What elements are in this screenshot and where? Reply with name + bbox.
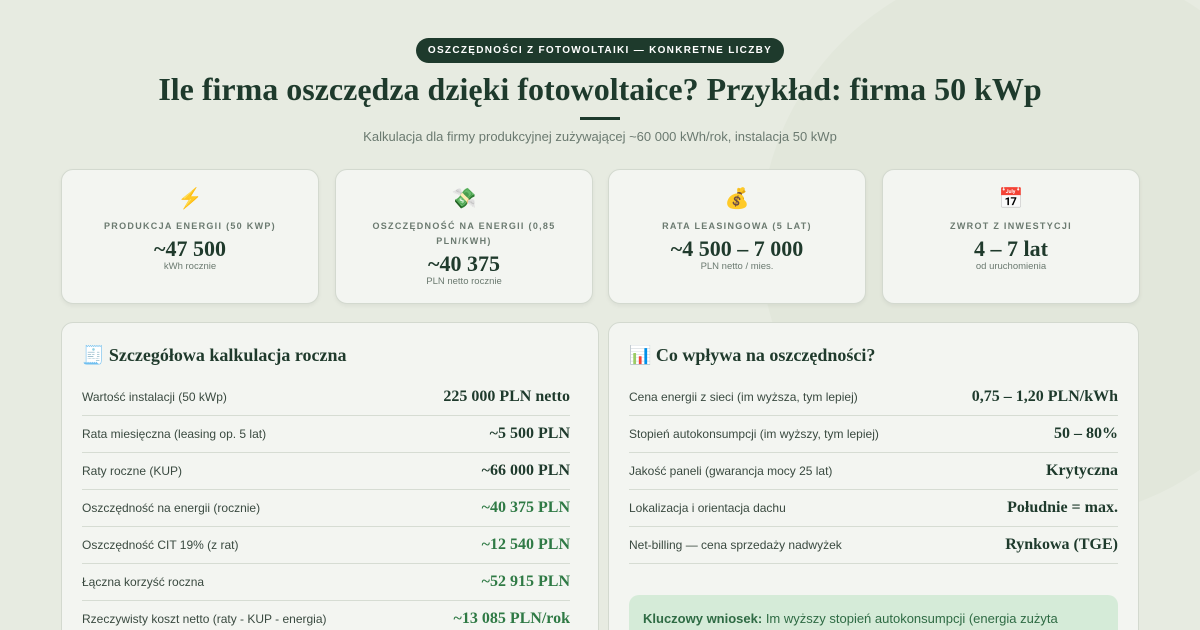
rows: ~40 375 PLN (482, 499, 570, 516)
heading: 📊 Co wpływa na oszczędności? (629, 345, 875, 365)
rows: Rata miesięczna (leasing op. 5 lat) (82, 427, 266, 441)
rows (82, 388, 570, 627)
rows (629, 388, 1118, 564)
rows: 225 000 PLN netto (443, 388, 570, 405)
card: ROI (882, 169, 1140, 304)
rows: Net-billing — cena sprzedaży nadwyżek (629, 538, 842, 552)
rows: Południe = max. (1007, 499, 1118, 516)
card: savings: PLN netto rocznie (426, 276, 502, 287)
card: production: ⚡ (178, 188, 202, 210)
heading: 🧾 Szczegółowa kalkulacja roczna (82, 345, 347, 365)
card: production: kWh rocznie (164, 261, 216, 272)
card: savings: 💸 (452, 188, 476, 210)
badge (416, 38, 784, 63)
badge: OSZCZĘDNOŚCI Z FOTOWOLTAIKI — KONKRETNE LICZBY (428, 45, 772, 56)
rows: ~12 540 PLN (482, 536, 570, 553)
card: production (61, 169, 319, 304)
card: savings (335, 169, 593, 304)
card: savings: ~40 375 (428, 251, 500, 276)
rows: Wartość instalacji (50 kWp) (82, 390, 227, 404)
card: leasing: RATA LEASINGOWA (5 LAT) (662, 221, 812, 231)
rows: ~13 085 PLN/rok (454, 610, 570, 627)
card: ROI: 📅 (999, 188, 1023, 210)
rows: Raty roczne (KUP) (82, 464, 182, 478)
panel: factors (608, 322, 1139, 630)
rows: Rzeczywisty koszt netto (raty - KUP - energia) (82, 612, 327, 626)
card: leasing: 💰 (725, 188, 749, 210)
card: leasing: ~4 500 – 7 000 (671, 236, 803, 261)
rows: Krytyczna (1046, 462, 1118, 479)
rows: ~66 000 PLN (482, 462, 570, 479)
card: ROI: ZWROT Z INWESTYCJI (950, 221, 1072, 231)
rows: ~5 500 PLN (490, 425, 570, 442)
card: production: ~47 500 (154, 236, 226, 261)
panel: calculation (61, 322, 599, 630)
rows: 0,75 – 1,20 PLN/kWh (972, 388, 1118, 405)
rows: Oszczędność na energii (rocznie) (82, 501, 260, 515)
rows: Oszczędność CIT 19% (z rat) (82, 538, 238, 552)
subtitle: Kalkulacja dla firmy produkcyjnej zużywającej ~60 000 kWh/rok, instalacja 50 kWp (363, 129, 837, 144)
card: ROI: od uruchomienia (976, 261, 1046, 272)
card: savings: OSZCZĘDNOŚĆ NA ENERGII (0,85 PLN/KWH) (372, 221, 556, 246)
rows: Łączna korzyść roczna (82, 575, 204, 589)
rows: Stopień autokonsumpcji (im wyższy, tym lepiej) (629, 427, 879, 441)
rows: Rynkowa (TGE) (1005, 536, 1118, 553)
card: ROI: 4 – 7 lat (974, 236, 1048, 261)
title: Ile firma oszczędza dzięki fotowoltaice? Przykład: firma 50 kWp (158, 71, 1042, 107)
card: leasing (608, 169, 866, 304)
rows: Jakość paneli (gwarancja mocy 25 lat) (629, 464, 832, 478)
card: leasing: PLN netto / mies. (701, 261, 773, 272)
rows: 50 – 80% (1054, 425, 1118, 442)
card: production: PRODUKCJA ENERGII (50 KWP) (104, 221, 276, 231)
rows: Cena energii z sieci (im wyższa, tym lepiej) (629, 390, 858, 404)
rows: ~52 915 PLN (482, 573, 570, 590)
callout (629, 595, 1118, 630)
rows: Lokalizacja i orientacja dachu (629, 501, 786, 515)
